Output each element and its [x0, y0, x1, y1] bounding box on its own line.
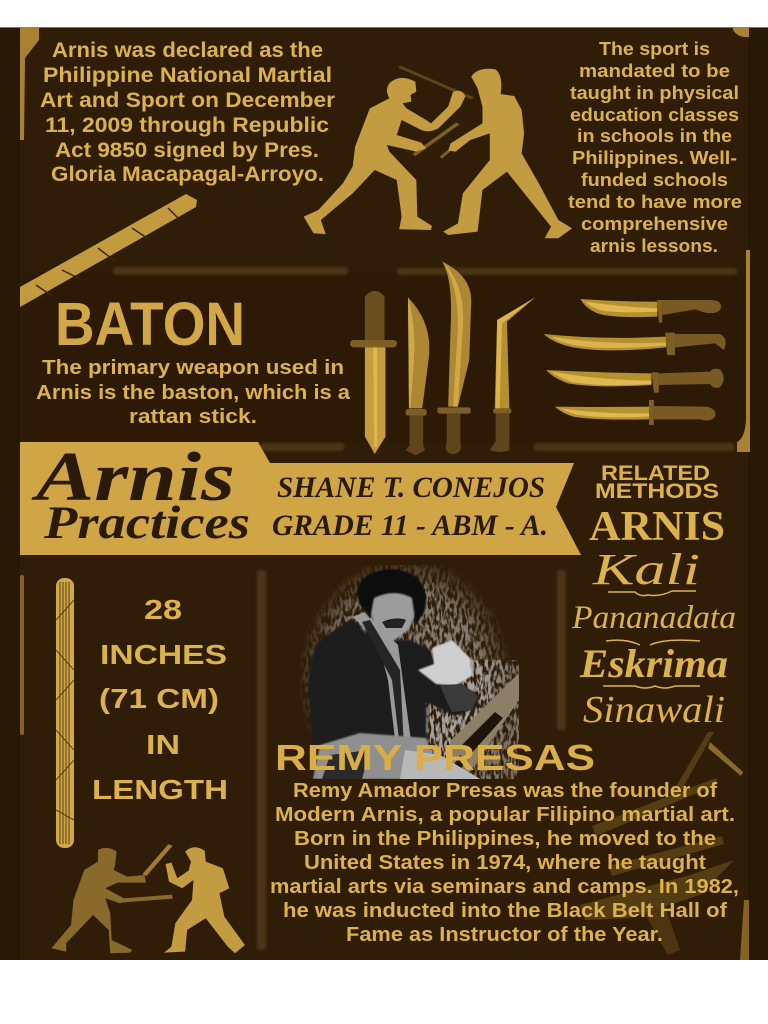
text: stick length: INCHES — [100, 639, 227, 670]
text: sport mandated in schools: tend to have more — [568, 192, 742, 212]
text: sport mandated in schools: Philippines. Well- — [572, 148, 737, 168]
text: stick length: 28 — [144, 594, 182, 625]
text: sport mandated in schools: The sport is — [599, 39, 710, 59]
text: Remy Presas biography: Born in the Philippines, he moved to the — [294, 828, 716, 850]
text: sport mandated in schools: mandated to be — [579, 61, 730, 81]
list: related methods: ARNIS — [589, 504, 725, 550]
photo: Remy Presas — [300, 565, 519, 779]
text: primary weapon: Arnis is the baston, which is a — [36, 381, 351, 404]
text: declared national sport: Philippine National Martial — [43, 64, 332, 87]
list: related methods — [571, 462, 736, 731]
decorative brush strokes — [113, 267, 737, 950]
text: sport mandated in schools: in schools in the — [577, 126, 732, 146]
list: related methods: Eskrima — [579, 641, 728, 686]
text: author and grade — [272, 471, 548, 542]
text: primary weapon — [36, 356, 351, 428]
text: Remy Presas biography: Modern Arnis, a popular Filipino martial art. — [275, 804, 735, 826]
text: Remy Presas biography: Remy Amador Presas was the founder of — [293, 780, 717, 802]
text: declared national sport: Gloria Macapagal-Arroyo. — [51, 163, 324, 186]
banner: title ribbon — [20, 442, 581, 555]
text: author and grade: SHANE T. CONEJOS — [277, 471, 545, 504]
text: declared national sport: 11, 2009 through Republic — [45, 114, 329, 137]
text: stick length: LENGTH — [92, 774, 228, 805]
text: sport mandated in schools: comprehensive — [581, 214, 728, 234]
text: sport mandated in schools: taught in physical — [570, 83, 739, 103]
list: related methods: Kali — [592, 545, 700, 594]
heading: Remy Presas: REMY PRESAS — [275, 737, 595, 778]
text: Remy Presas biography: Fame as Instructor of the Year. — [346, 924, 663, 946]
icon: two arnis fighters — [304, 67, 572, 238]
text: stick length — [92, 594, 228, 805]
text: sport mandated in schools: arnis lessons. — [590, 236, 718, 256]
text: sport mandated in schools: education classes — [570, 105, 739, 125]
list: related methods: METHODS — [595, 480, 719, 503]
list: related methods: Sinawali — [583, 689, 725, 731]
icon: knives — [544, 299, 726, 425]
faded knives behind bio — [580, 732, 743, 955]
text: Remy Presas biography — [270, 780, 739, 946]
text: author and grade: GRADE 11 - ABM - A. — [272, 509, 548, 542]
icon: vertical rattan stick — [56, 578, 74, 848]
text: primary weapon: rattan stick. — [129, 405, 257, 428]
title: Arnis Practices: Arnis — [31, 439, 235, 516]
text: Remy Presas biography: he was inducted into the Black Belt Hall of — [283, 900, 727, 922]
list: related methods: RELATED — [601, 462, 710, 485]
title: Arnis Practices: Practices — [43, 497, 250, 549]
text: declared national sport — [40, 39, 335, 186]
text: stick length: (71 CM) — [99, 683, 219, 714]
icon: small fighters — [51, 845, 245, 953]
text: declared national sport: Act 9850 signed by Pres. — [55, 139, 319, 162]
icon: striped baton — [20, 194, 197, 307]
text: Remy Presas biography: martial arts via seminars and camps. In 1982, — [270, 876, 739, 898]
text: primary weapon: The primary weapon used in — [42, 356, 344, 379]
list: related methods: Pananadata — [571, 600, 736, 636]
title: Arnis Practices — [31, 439, 250, 549]
text: sport mandated in schools — [568, 39, 742, 256]
text: Remy Presas biography: United States in 1974, where he taught — [304, 852, 706, 874]
icon: swords — [350, 262, 535, 455]
text: sport mandated in schools: funded schools — [581, 170, 728, 190]
text: stick length: IN — [146, 729, 180, 760]
text: declared national sport: Art and Sport on December — [40, 89, 335, 112]
text: declared national sport: Arnis was declared as the — [52, 39, 323, 62]
heading: baton: BATON — [55, 290, 245, 358]
